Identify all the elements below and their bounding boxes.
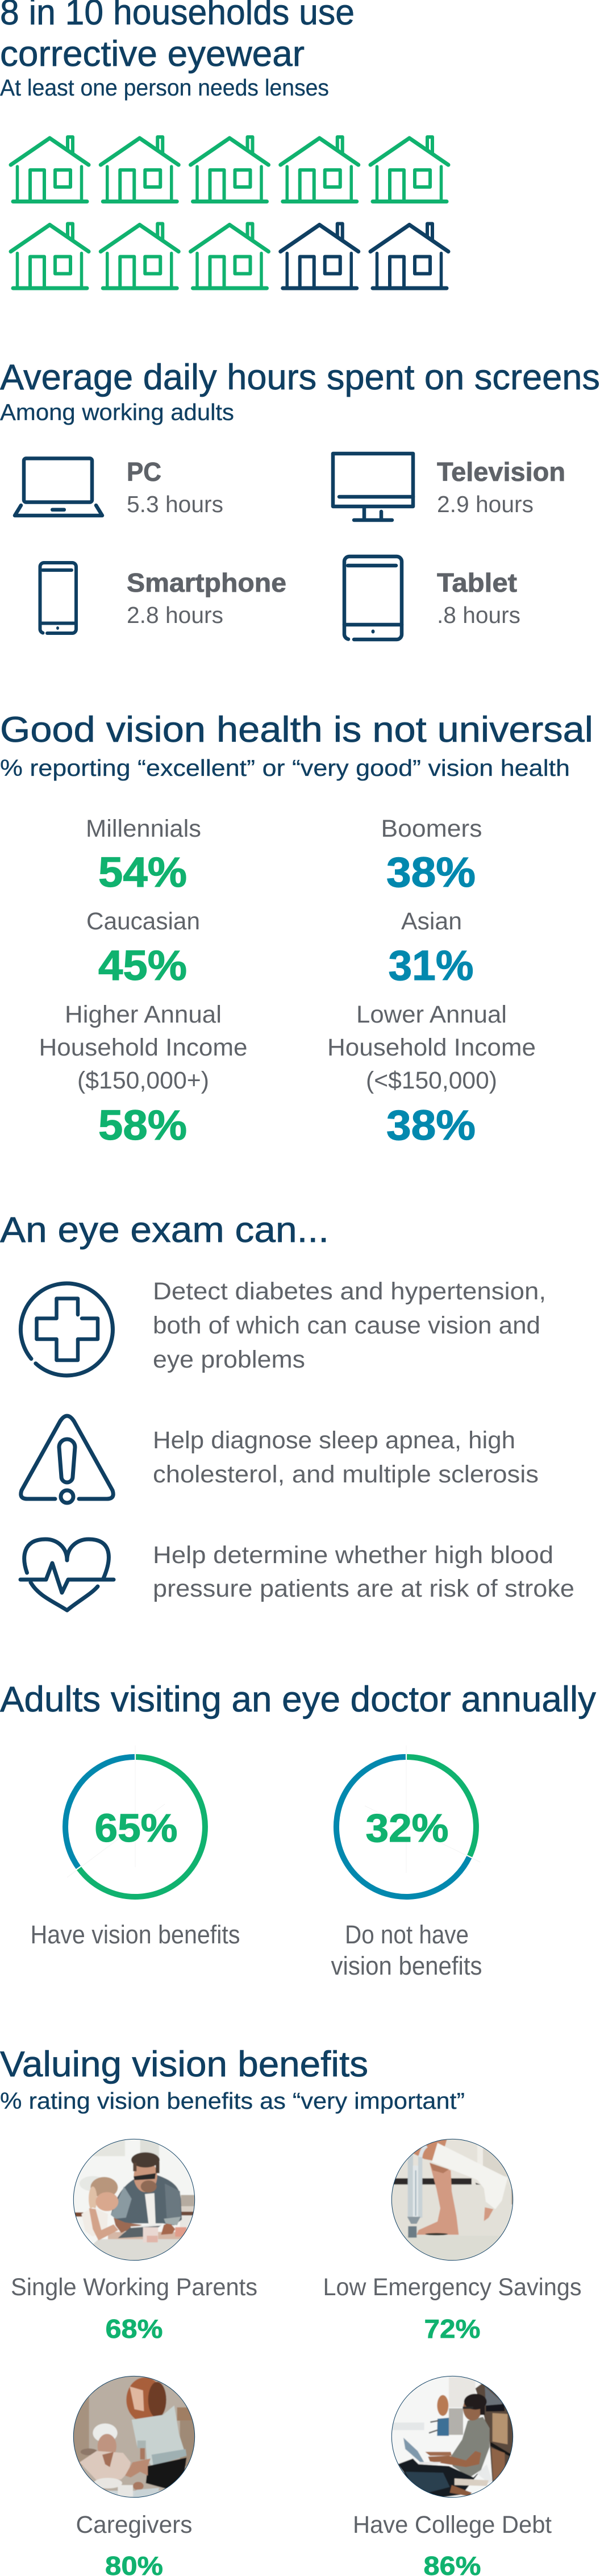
text: detect diabetes: both of which can cause vision and — [153, 1312, 540, 1339]
stat: lower income: (<$150,000) — [366, 1067, 497, 1094]
stat: higher income: Household Income — [39, 1034, 248, 1061]
label: single working parents: Single Working Parents — [11, 2274, 257, 2301]
stat: PC hours: PC — [127, 457, 161, 487]
heading: valuing vision benefits: Valuing vision benefits — [0, 2045, 368, 2084]
panel: an eye exam can — [0, 1210, 574, 1610]
heading: 8 in 10 households — [0, 0, 355, 74]
panel: valuing vision benefits — [0, 2045, 582, 2576]
stat: PC hours — [127, 457, 223, 517]
icon: medical cross in circle — [20, 1283, 113, 1376]
donut chart: 32 percent — [336, 1746, 480, 1897]
donut chart: 65 percent: 65% — [94, 1806, 177, 1850]
stat: television hours: Television — [437, 457, 565, 487]
icon: warning triangle — [21, 1416, 113, 1503]
stat: lower income: Lower Annual — [356, 1001, 507, 1028]
subheading: lenses: At least one person needs lenses — [0, 74, 329, 101]
label: have vision benefits: Have vision benefits — [31, 1920, 240, 1949]
label: caregivers — [76, 2511, 192, 2576]
subheading: very important: % rating vision benefits as “very important” — [0, 2088, 465, 2114]
panel: households using corrective eyewear — [0, 0, 448, 288]
stat: PC hours: 5.3 hours — [127, 491, 223, 517]
stat: millennials: Millennials — [86, 815, 201, 842]
label: have college debt: Have College Debt — [353, 2511, 552, 2538]
label: low emergency savings: Low Emergency Savings — [323, 2274, 582, 2301]
heading: good vision health: Good vision health is not universal — [0, 710, 593, 750]
stat: caucasian: 45% — [98, 942, 187, 989]
label: do not have vision benefits: Do not have — [345, 1920, 469, 1949]
text: detect diabetes — [153, 1278, 546, 1373]
stat: boomers — [381, 815, 482, 896]
label: single working parents — [11, 2274, 257, 2344]
stat: television hours — [437, 457, 565, 517]
icon: heart with pulse — [20, 1539, 114, 1610]
stat: millennials — [86, 815, 201, 896]
stat: television hours: 2.9 hours — [437, 491, 534, 517]
stat: millennials: 54% — [98, 849, 187, 896]
photo: father and daughter with tablet — [73, 2138, 195, 2261]
icon grid: 8 green houses and 2 navy houses — [11, 137, 448, 288]
text: sleep apnea — [153, 1427, 539, 1488]
stat: caucasian: Caucasian — [86, 908, 200, 935]
stat: asian — [389, 908, 474, 989]
text: detect diabetes: Detect diabetes and hypertension, — [153, 1278, 546, 1305]
panel: adults visiting an eye doctor — [0, 1680, 597, 1980]
photo: caregiver with elderly woman — [73, 2376, 195, 2498]
label: single working parents: 68% — [106, 2314, 163, 2344]
text: high blood pressure: Help determine whether high blood — [153, 1542, 553, 1569]
stat: higher income: 58% — [98, 1102, 187, 1149]
stat: lower income: 38% — [386, 1102, 476, 1149]
stat: higher income — [39, 1001, 248, 1149]
subheading: percent reporting: % reporting “excellent” or “very good” vision health — [0, 755, 570, 781]
label: have college debt — [353, 2511, 552, 2576]
label: do not have vision benefits — [331, 1920, 482, 1980]
heading: an eye exam can: An eye exam can... — [0, 1210, 329, 1250]
text: sleep apnea: Help diagnose sleep apnea, high — [153, 1427, 515, 1454]
stat: boomers: 38% — [386, 849, 476, 896]
stat: tablet hours: .8 hours — [437, 602, 520, 628]
stat: lower income — [327, 1001, 536, 1149]
stat: higher income: Higher Annual — [65, 1001, 222, 1028]
stat: smartphone hours — [127, 568, 286, 628]
donut chart: 32 percent: 32% — [366, 1806, 449, 1850]
text: detect diabetes: eye problems — [153, 1346, 305, 1373]
label: low emergency savings: 72% — [424, 2314, 481, 2344]
panel: good vision health — [0, 710, 593, 1149]
subheading: working adults: Among working adults — [0, 399, 234, 425]
stat: boomers: Boomers — [381, 815, 482, 842]
text: high blood pressure — [153, 1542, 574, 1602]
stat: smartphone hours: Smartphone — [127, 568, 286, 597]
label: do not have vision benefits: vision benefits — [331, 1951, 482, 1980]
stat: tablet hours: Tablet — [437, 568, 517, 597]
stat: lower income: Household Income — [327, 1034, 536, 1061]
text: sleep apnea: cholesterol, and multiple sclerosis — [153, 1461, 539, 1488]
stat: asian: Asian — [401, 908, 462, 935]
donut chart: 65 percent — [65, 1746, 205, 1897]
heading: 8 in 10 households: corrective eyewear — [0, 34, 305, 74]
label: caregivers: Caregivers — [76, 2511, 192, 2538]
panel: daily hours on screens — [0, 358, 600, 639]
photo: leg in cast with crutch — [391, 2138, 514, 2261]
icon: tablet — [344, 556, 402, 639]
heading: average daily hours: Average daily hours spent on screens — [0, 358, 600, 397]
stat: tablet hours — [437, 568, 520, 628]
stat: higher income: ($150,000+) — [77, 1067, 209, 1094]
stat: asian: 31% — [389, 942, 474, 989]
photo: student with laptop by bookshelf — [391, 2376, 514, 2498]
text: high blood pressure: pressure patients are at risk of stroke — [153, 1575, 574, 1602]
label: low emergency savings — [323, 2274, 582, 2344]
icon: laptop — [15, 458, 102, 516]
icon: smartphone — [40, 563, 76, 633]
stat: smartphone hours: 2.8 hours — [127, 602, 223, 628]
stat: caucasian — [86, 908, 200, 989]
icon: television — [333, 454, 413, 520]
heading: adults visiting: Adults visiting an eye doctor annually — [0, 1680, 597, 1719]
